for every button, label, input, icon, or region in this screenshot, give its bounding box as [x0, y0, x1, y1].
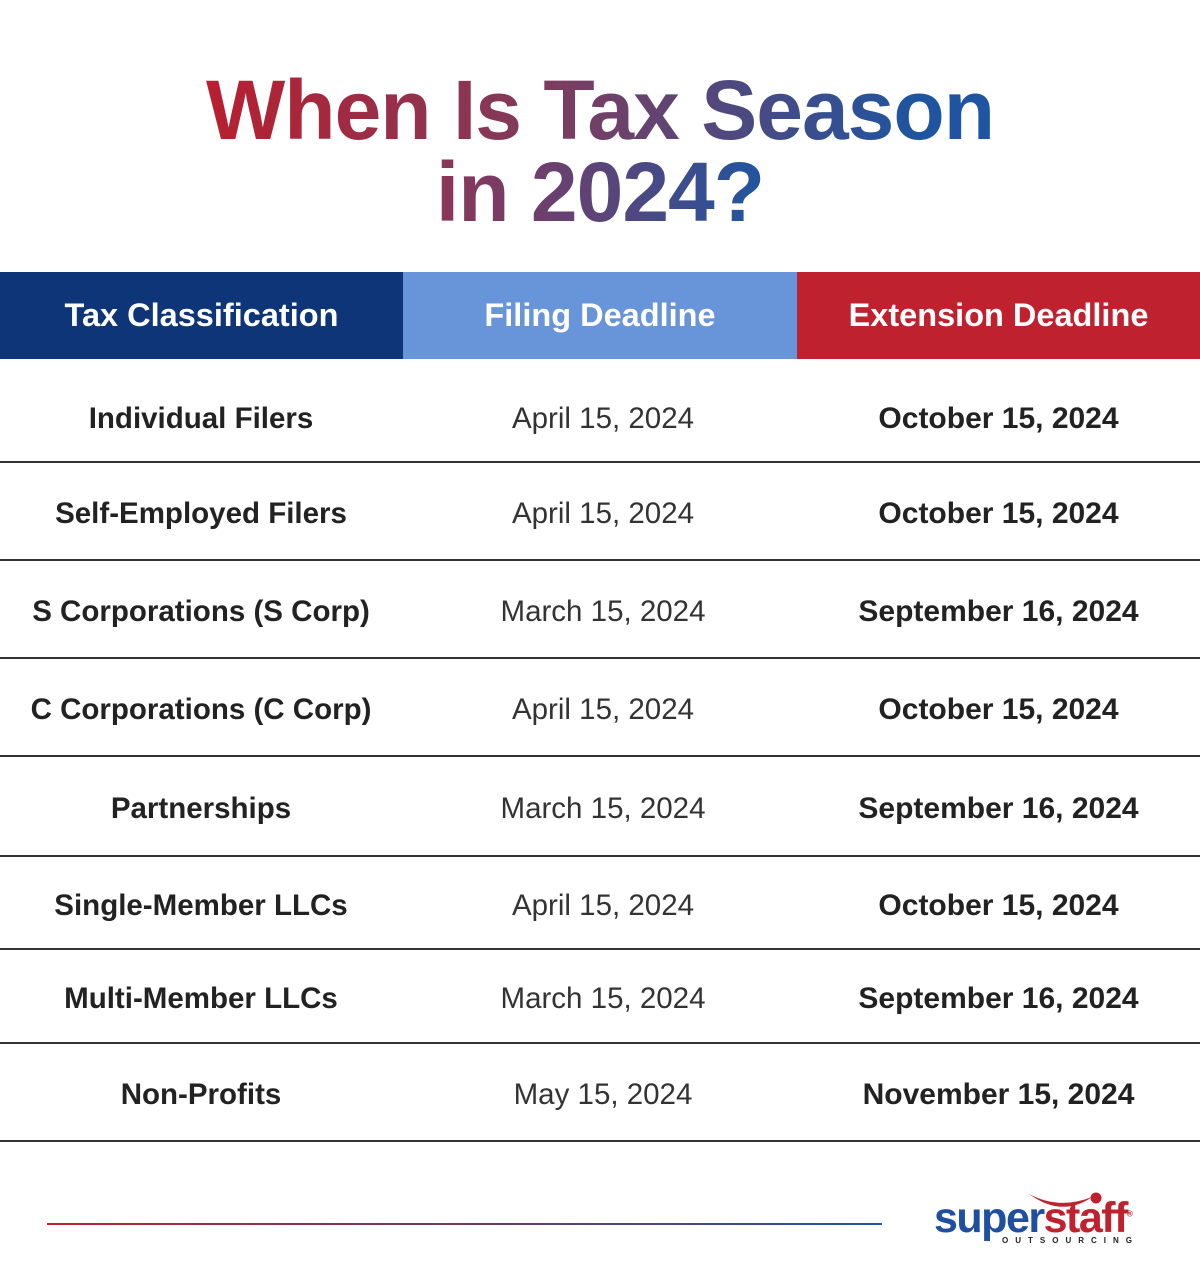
header: tax classification: Tax Classification: [65, 297, 338, 333]
row: non-profits: [0, 1044, 1200, 1142]
row: multi-member llc: [0, 950, 1200, 1044]
row: c corp: C Corporations (C Corp): [31, 693, 371, 726]
row: single-member llc: April 15, 2024: [512, 888, 694, 922]
title: in 2024?: [436, 145, 764, 239]
row: s corp: S Corporations (S Corp): [32, 595, 370, 628]
row: s corp: [0, 561, 1200, 659]
logo: superstaff outsourcing: superstaff®: [934, 1194, 1131, 1242]
row: c corp: [0, 659, 1200, 757]
row: self-employed: Self-Employed Filers: [55, 497, 347, 530]
row: single-member llc: October 15, 2024: [878, 888, 1119, 922]
row: s corp: March 15, 2024: [500, 595, 706, 628]
row: s corp: September 16, 2024: [858, 595, 1139, 628]
header: tax classification: [0, 272, 403, 359]
logo: superstaff outsourcing: OUTSOURCING: [1002, 1236, 1139, 1245]
row: non-profits: November 15, 2024: [863, 1078, 1134, 1111]
header: extension deadline: Extension Deadline: [849, 297, 1148, 333]
row: partnerships: March 15, 2024: [500, 792, 706, 825]
header: extension deadline: [797, 272, 1200, 359]
title: When Is Tax Season: [206, 63, 994, 157]
row: single-member llc: [0, 857, 1200, 950]
row: partnerships: [0, 757, 1200, 857]
header: filing deadline: [403, 272, 797, 359]
row: individual filers: October 15, 2024: [878, 402, 1119, 434]
header: filing deadline: Filing Deadline: [484, 297, 716, 333]
row: individual filers: April 15, 2024: [512, 402, 694, 434]
row: self-employed: October 15, 2024: [878, 497, 1119, 530]
row: c corp: October 15, 2024: [878, 693, 1119, 726]
row: multi-member llc: March 15, 2024: [500, 982, 706, 1015]
row: self-employed: April 15, 2024: [512, 497, 694, 530]
row: self-employed: [0, 463, 1200, 561]
row: single-member llc: Single-Member LLCs: [54, 888, 348, 922]
row: partnerships: Partnerships: [111, 792, 291, 825]
row: c corp: April 15, 2024: [512, 693, 694, 726]
row: multi-member llc: Multi-Member LLCs: [64, 982, 338, 1015]
row: individual filers: [0, 370, 1200, 463]
row: non-profits: May 15, 2024: [514, 1078, 692, 1111]
row: multi-member llc: September 16, 2024: [858, 982, 1139, 1015]
row: individual filers: Individual Filers: [89, 402, 313, 434]
row: non-profits: Non-Profits: [121, 1078, 281, 1111]
row: partnerships: September 16, 2024: [858, 792, 1139, 825]
title: [206, 63, 994, 239]
